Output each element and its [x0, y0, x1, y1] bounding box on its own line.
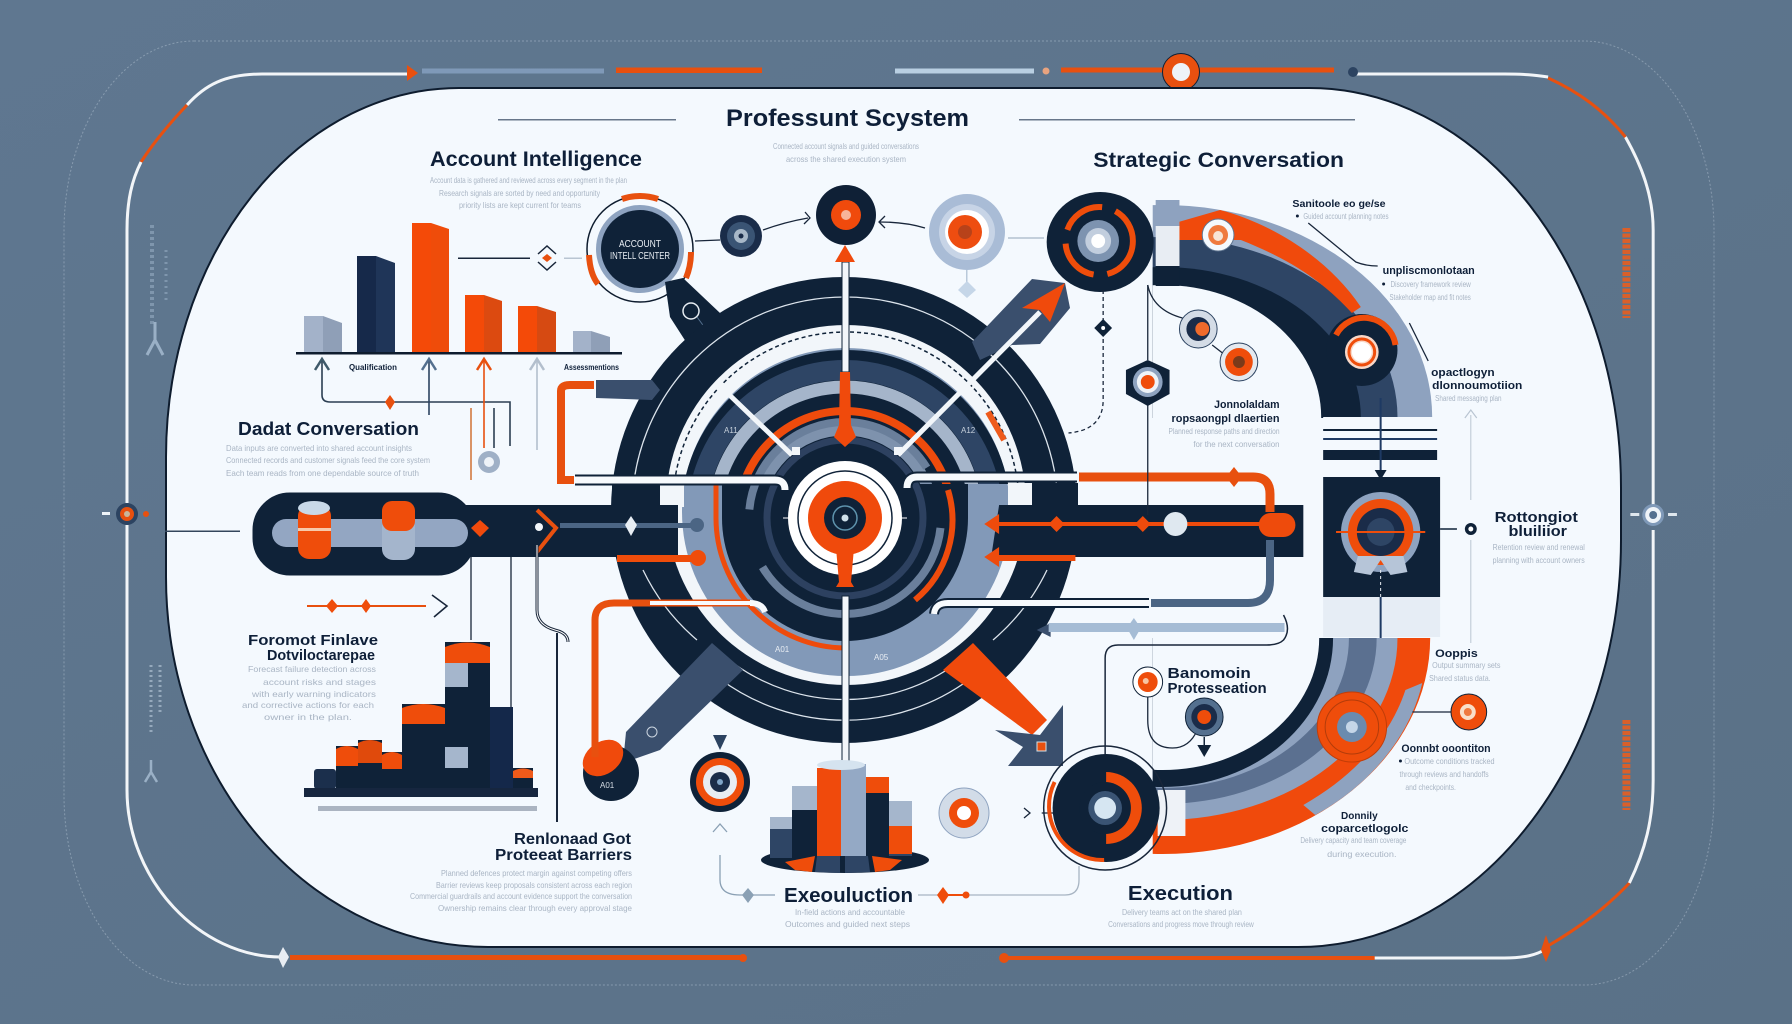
central hub: A12	[961, 426, 976, 435]
heading: protect barriers: Planned defences protect margin against competing offers	[441, 868, 632, 878]
heading: account intelligence: Account data is gathered and reviewed across every segment in the plan	[430, 175, 627, 185]
label: strategic engine	[1292, 199, 1389, 221]
heading: forecast: Forecast failure detection across	[248, 664, 376, 674]
label: delivery: Donnily	[1341, 811, 1378, 822]
heading: forecast: and corrective actions for each	[242, 700, 374, 710]
heading: protect barriers: Renlonaad Got	[514, 831, 632, 848]
label: strategic engine: Sanitoole eo ge/se	[1292, 199, 1386, 210]
heading: execution right	[1108, 883, 1254, 929]
label: response direction	[1169, 399, 1280, 449]
label: outcome condition: and checkpoints.	[1405, 782, 1456, 792]
bar chart: forecast	[304, 642, 538, 811]
label: response direction: ropsaongpl dlaertien	[1172, 413, 1280, 425]
heading: account intelligence: priority lists are kept current for teams	[459, 200, 581, 210]
heading: protect barriers: Proteeat Barriers	[495, 847, 632, 864]
heading: forecast: with early warning indicators	[251, 689, 376, 699]
top node	[816, 185, 876, 245]
heading: account intelligence: Account Intelligence	[430, 148, 642, 171]
heading: forecast: Foromot Finlave	[248, 633, 378, 649]
central hub	[611, 277, 1078, 743]
right arch: upper	[1152, 200, 1432, 418]
main panel	[166, 88, 1621, 947]
badge: account intelligence center: INTELL CENTER	[610, 251, 670, 262]
link to badge with diamond icon	[458, 246, 582, 270]
central hub: A05	[874, 653, 889, 662]
right node	[1630, 504, 1677, 526]
bar chart: execution	[761, 760, 929, 873]
label: outcome condition	[1399, 743, 1495, 792]
label: outputs: Output summary sets	[1432, 660, 1501, 670]
title: Professunt Scystem	[726, 105, 969, 132]
hub: execution	[1044, 746, 1167, 870]
label: retention blueprint: Rottongiot	[1495, 509, 1578, 526]
label: qualification: unpliscmonlotaan	[1383, 265, 1475, 277]
label: benchmark protection	[1133, 665, 1267, 757]
label: outcome condition: through reviews and handoffs	[1399, 769, 1489, 779]
label: qualification	[1382, 265, 1475, 302]
label: outcome condition: Outcome conditions tracked	[1404, 756, 1495, 766]
label: response direction: Jonnolaldam	[1214, 399, 1280, 411]
top-right arrow	[898, 279, 1070, 455]
label: delivery	[1300, 811, 1408, 859]
heading: forecast: Dotviloctarepae	[267, 648, 375, 664]
label: benchmark protection: Protesseation	[1168, 680, 1267, 697]
label: strategic engine: Guided account planning notes	[1303, 211, 1389, 221]
side decoration: upper left	[147, 225, 166, 355]
label: response direction: for the next conversation	[1193, 439, 1280, 449]
title: across the shared execution system	[786, 154, 906, 164]
label: delivery: Delivery capacity and team coverage	[1300, 835, 1407, 845]
right band with flow arrows	[984, 505, 1303, 567]
heading: execution left: In-field actions and accountable	[795, 907, 905, 917]
node: benchmark	[1126, 360, 1170, 406]
label: outputs: Ooppis	[1435, 648, 1478, 660]
heading: data conversation	[226, 419, 430, 478]
heading: execution left: Outcomes and guided next steps	[785, 919, 910, 929]
dashed-line diamond	[1094, 319, 1112, 337]
heading: account intelligence: Research signals are sorted by need and opportunity	[439, 188, 601, 198]
heading: protect barriers	[410, 831, 632, 913]
title: Connected account signals and guided conversations	[773, 141, 919, 151]
heading: execution left: Exeouluction	[784, 885, 913, 907]
label: delivery: during execution.	[1327, 849, 1396, 859]
chart connectors	[315, 359, 544, 480]
thin connectors: right	[1042, 223, 1451, 813]
left pipes	[561, 380, 785, 757]
execution flow connectors	[713, 824, 1079, 904]
bottom nodes	[278, 935, 1551, 968]
arch small node	[1202, 219, 1234, 251]
outer flow ring: right	[1004, 74, 1653, 958]
label: specific communication	[1431, 367, 1522, 500]
output node	[1451, 694, 1487, 730]
label: response direction: Planned response paths and direction	[1169, 426, 1280, 436]
left capsule band	[165, 492, 706, 576]
label: retention blueprint	[1440, 509, 1585, 643]
right arch: lower	[1152, 638, 1430, 854]
heading: execution left	[784, 885, 913, 929]
label: retention blueprint: bluiliior	[1508, 523, 1567, 540]
arch node	[1326, 314, 1397, 386]
heading: data conversation: Data inputs are converted into shared account insights	[226, 443, 412, 453]
bar chart: account intelligence: Assessmentions	[564, 362, 619, 372]
label: specific communication: opactlogyn	[1431, 367, 1495, 379]
outer flow ring: left	[127, 74, 742, 958]
heading: data conversation: Connected records and customer signals feed the core system	[226, 455, 430, 465]
heading: execution right: Conversations and progress move through review	[1108, 919, 1254, 929]
node: right of chart	[939, 788, 1030, 838]
bar chart: account intelligence: Qualification	[349, 362, 397, 372]
heading: strategic conversation: Strategic Conversation	[1093, 149, 1344, 172]
label: outcome condition: Oonnbt ooontiton	[1401, 743, 1491, 755]
heading: execution right: Delivery teams act on the shared plan	[1122, 907, 1242, 917]
node: target lower	[690, 735, 750, 812]
heading: data conversation: Each team reads from one dependable source of truth	[226, 468, 419, 478]
top bars and markers	[407, 54, 1358, 90]
heading: data conversation: Dadat Conversation	[238, 419, 419, 439]
heading: protect barriers: Ownership remains clear through every approval stage	[438, 903, 632, 913]
right node with pointer	[929, 194, 1044, 298]
label: qualification: Stakeholder map and fit notes	[1390, 292, 1471, 302]
center target	[783, 461, 907, 587]
label: outputs: Shared status data.	[1429, 673, 1491, 683]
small node	[720, 215, 762, 257]
label: specific communication: dlonnoumotiion	[1432, 380, 1522, 392]
thin connectors: left	[471, 545, 568, 822]
right stripes and gauge block	[1323, 398, 1440, 640]
central hub: A01	[775, 645, 790, 654]
heading: account intelligence	[430, 148, 642, 210]
node connectors	[695, 212, 925, 241]
label: benchmark protection: Banomoin	[1168, 665, 1251, 682]
lower arch orange node	[1317, 692, 1387, 762]
label: outputs	[1429, 648, 1501, 683]
left node	[102, 503, 149, 525]
top-left white arm	[717, 383, 792, 455]
label: retention blueprint: planning with account owners	[1493, 555, 1585, 565]
bottom-left arrow	[576, 643, 743, 801]
hub: strategic conversation	[1047, 192, 1154, 292]
heading: forecast	[242, 633, 378, 722]
label: specific communication: Shared messaging plan	[1435, 393, 1502, 403]
label: delivery: coparcetlogolc	[1321, 823, 1408, 835]
label: qualification: Discovery framework review	[1391, 279, 1471, 289]
heading: protect barriers: Commercial guardrails and account evidence support the conversation	[410, 891, 632, 901]
lower light arrow	[1037, 615, 1287, 755]
badge: account intelligence center: ACCOUNT	[619, 239, 661, 250]
right pipes	[907, 467, 1270, 614]
heading: forecast: account risks and stages	[263, 677, 376, 687]
small flow arrow	[307, 595, 447, 617]
side decoration: right orange stripes	[1622, 228, 1630, 810]
badge: account intelligence center	[587, 196, 693, 302]
side decoration: lower left	[145, 665, 160, 782]
heading: execution right: Execution	[1128, 883, 1233, 905]
bottom-right arrow	[943, 643, 1063, 766]
label: retention blueprint: Retention review and renewal	[1493, 542, 1585, 552]
heading: protect barriers: Barrier reviews keep proposals consistent across each region	[436, 880, 632, 890]
bottom-left arrow: A01	[600, 781, 615, 790]
paired nodes	[1179, 310, 1258, 381]
central hub: A11	[724, 426, 738, 435]
bar chart: account intelligence	[296, 223, 622, 372]
heading: forecast: owner in the plan.	[264, 712, 352, 722]
title	[498, 105, 1355, 164]
vertical spine	[834, 245, 856, 764]
tab on hub	[665, 278, 730, 362]
